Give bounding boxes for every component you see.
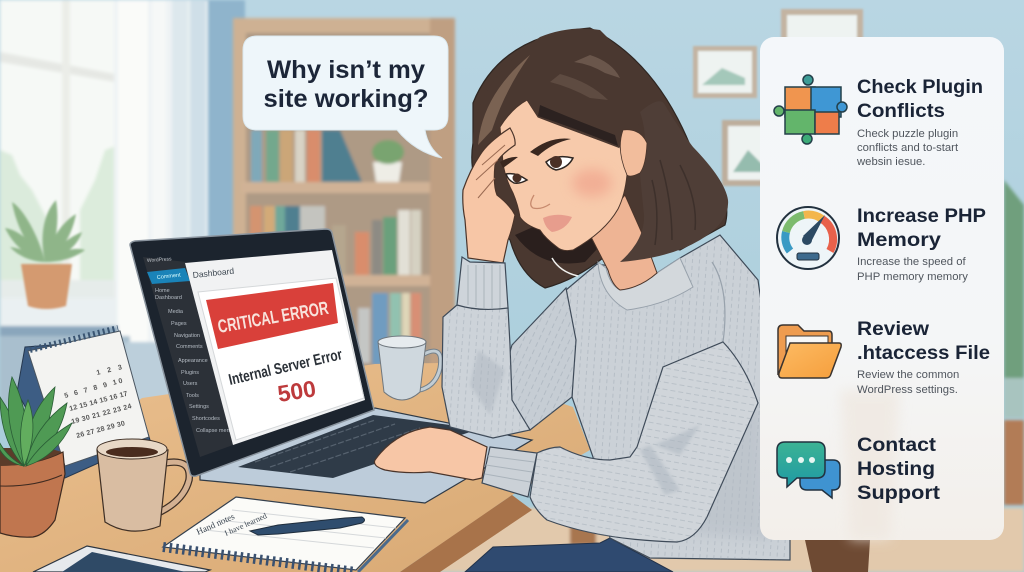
eyes — [546, 157, 573, 170]
step: review htaccess file: WordPress settings. — [857, 384, 958, 396]
jeans — [465, 538, 673, 572]
panel: troubleshooting steps — [760, 37, 1004, 540]
laptop: Appearance — [178, 358, 208, 364]
step: increase php memory: Increase PHP — [857, 205, 986, 227]
sidebar — [143, 257, 233, 457]
icon: desk calendar: 26 27 28 29 30 — [76, 420, 126, 440]
typing hand — [374, 427, 487, 480]
step: increase php memory — [777, 205, 986, 283]
laptop base — [200, 408, 532, 503]
sweater shade — [640, 400, 770, 540]
laptop: 500 — [276, 375, 318, 407]
icon: puzzle pieces — [774, 75, 847, 144]
neck — [590, 195, 657, 290]
step: review htaccess file: Review — [857, 318, 930, 340]
laptop: Users — [183, 381, 198, 387]
laptop: Dashboard — [155, 295, 182, 301]
background: window and curtains — [0, 0, 245, 406]
laptop lid — [130, 229, 374, 476]
background: framed pictures — [693, 9, 863, 186]
desk — [0, 363, 590, 572]
laptop: Pages — [171, 321, 187, 327]
step: check plugin conflicts: Check Plugin — [857, 76, 983, 98]
icon: chat bubbles — [777, 442, 840, 498]
laptop: Home — [155, 288, 170, 294]
step: review htaccess file: Review the common — [857, 369, 959, 381]
laptop: Internal Server Error — [227, 346, 344, 389]
upper left arm — [500, 288, 576, 430]
laptop: Shortcodes — [192, 416, 220, 422]
step: contact hosting support — [777, 434, 941, 504]
step: contact hosting support: Contact — [857, 434, 937, 456]
right sleeve — [530, 342, 758, 542]
laptop: Tools — [186, 393, 199, 399]
blush — [572, 169, 612, 197]
step: increase php memory: Increase the speed of — [857, 256, 967, 268]
dashboard screen — [185, 250, 365, 445]
icon: desk calendar: 5 6 7 8 9 10 — [64, 378, 124, 400]
step: review htaccess file — [778, 318, 990, 396]
laptop: Navigation — [174, 333, 200, 339]
icon: potted plant on desk — [0, 377, 72, 537]
error card — [198, 278, 364, 440]
laptop: WordPress — [147, 256, 172, 264]
left cuff — [457, 257, 508, 309]
sweater body — [566, 235, 790, 560]
speech bubble — [243, 36, 448, 158]
laptop: Comment — [157, 272, 181, 281]
face — [500, 100, 627, 251]
icon: coffee mug on desk — [97, 439, 189, 531]
sweater collar — [598, 258, 693, 310]
step: increase php memory: Memory — [857, 229, 941, 251]
step: increase php memory: PHP memory memory — [857, 271, 968, 283]
hair behind — [472, 28, 727, 288]
icon: spiral notebook and pen: Hand notes — [195, 511, 236, 537]
icon: potted plant on windowsill — [5, 200, 85, 309]
hair front — [473, 29, 660, 165]
step: check plugin conflicts: Check puzzle plugin — [857, 128, 958, 140]
icon: spiral notebook and pen — [163, 497, 408, 572]
icon: folder — [778, 325, 841, 378]
laptop: Media — [168, 309, 184, 315]
keyboard — [238, 415, 470, 478]
laptop: CRITICAL ERROR — [216, 297, 330, 337]
icon: speed gauge — [777, 207, 839, 269]
chair — [805, 540, 870, 572]
step: check plugin conflicts: websin iesue. — [856, 156, 925, 168]
step: contact hosting support: Support — [857, 482, 941, 504]
step: check plugin conflicts — [774, 75, 983, 168]
icon: spiral notebook and pen: I have learned — [223, 511, 268, 538]
coffee cup behind laptop — [378, 336, 441, 400]
step: check plugin conflicts: Conflicts — [857, 100, 945, 122]
raised hand — [463, 128, 515, 263]
hair right lock — [620, 101, 728, 262]
icon: tablet on desk — [33, 546, 210, 572]
laptop: Comments — [176, 344, 203, 350]
left sleeve — [442, 305, 530, 438]
shoulder seam — [663, 262, 725, 367]
icon: desk calendar: 12 15 14 15 16 17 — [69, 391, 129, 413]
background: right plant and floor — [430, 180, 1024, 572]
right cuff — [482, 447, 537, 497]
nose and mouth — [531, 195, 550, 208]
laptop: Collapse menu — [196, 428, 233, 434]
icon: desk calendar: 19 30 21 22 23 24 — [71, 403, 132, 426]
icon: desk calendar — [17, 328, 150, 478]
speech bubble: site working? — [264, 85, 428, 113]
critical error banner — [206, 283, 338, 349]
step: review htaccess file: .htaccess File — [857, 342, 990, 364]
ear — [620, 130, 647, 176]
step: contact hosting support: Hosting — [857, 458, 935, 480]
laptop — [130, 229, 532, 503]
speech bubble: Why isn’t my — [267, 56, 425, 84]
laptop: Dashboard — [192, 266, 235, 280]
eyebrows — [500, 139, 571, 168]
step: check plugin conflicts: conflicts and to-start — [857, 142, 959, 154]
laptop: Plugins — [181, 370, 199, 376]
background: bookshelf — [233, 18, 455, 398]
laptop: Settings — [189, 404, 209, 410]
icon: desk calendar: 1 2 3 — [96, 364, 123, 377]
woman — [374, 28, 870, 572]
